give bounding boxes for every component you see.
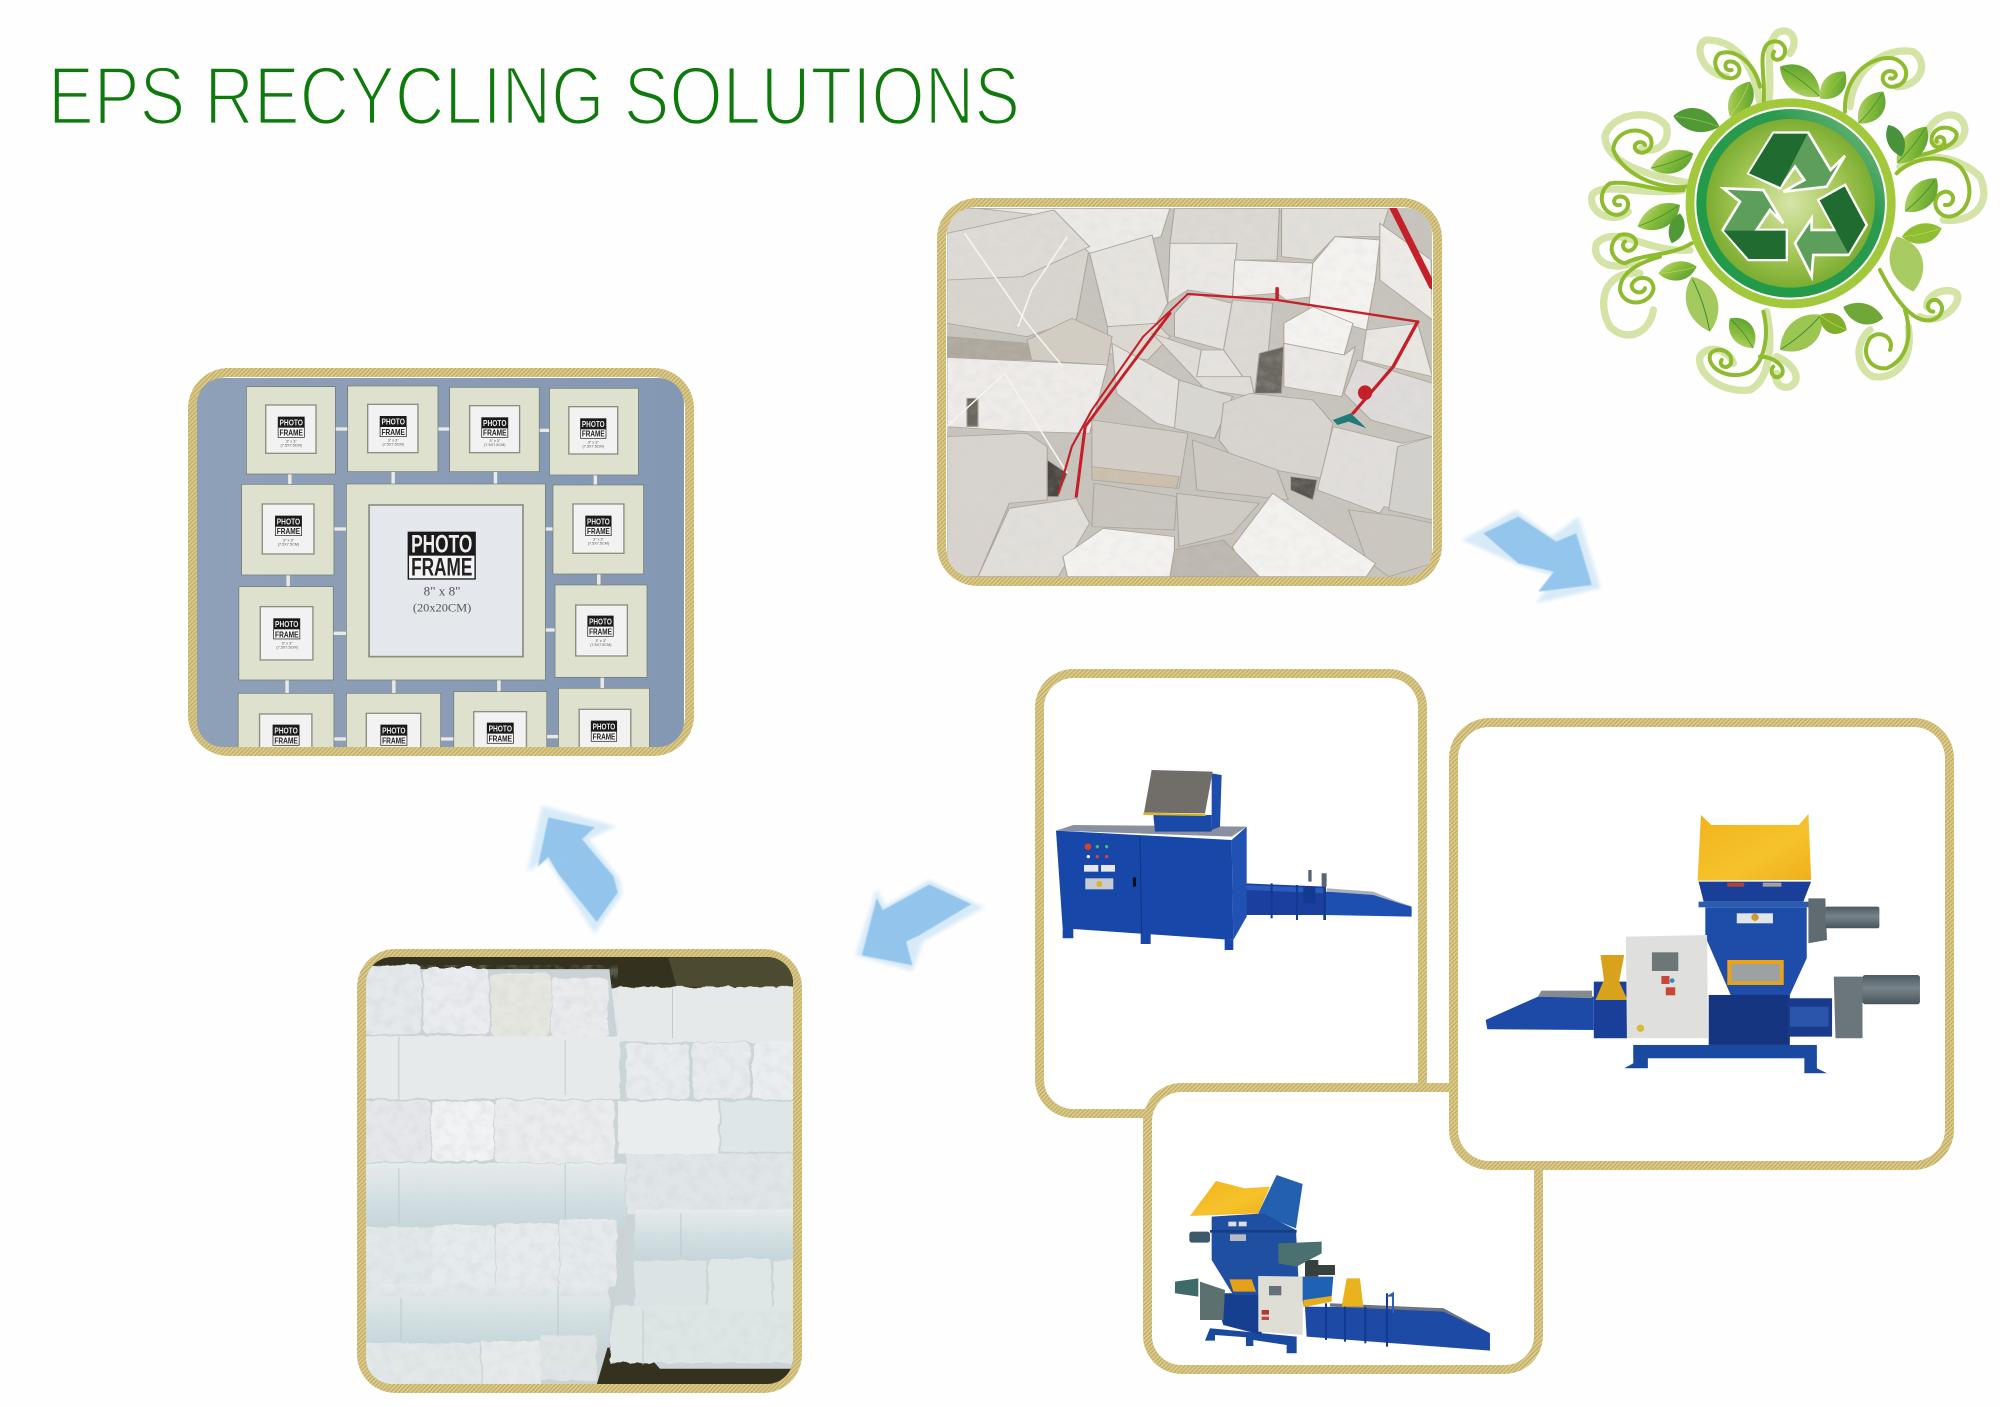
photo frame 7: 3" x 3" [593, 538, 605, 542]
photo frame 1: (7.5X7.5CM) [281, 444, 302, 448]
photo frame 6: large centre frame: PHOTO [411, 531, 472, 559]
photo frame 1: 3" x 3" [286, 440, 297, 444]
photo frame 2: (7.5X7.5CM) [382, 443, 404, 447]
left stack [357, 969, 626, 1384]
photo frame 6: large centre frame: FRAME [411, 554, 472, 582]
arrow: machine to blocks [856, 880, 984, 971]
photo frame 10: FRAME [274, 736, 298, 746]
green vine spirals [1602, 41, 1969, 377]
panel: densifier machine, front view [1454, 722, 1950, 1166]
photo frame 9: PHOTO [589, 616, 612, 626]
panel: recycled photo frame product [191, 372, 690, 753]
pale vine shadows [1592, 31, 1984, 390]
photo frame 1 [246, 387, 335, 474]
right stack [614, 1040, 793, 1369]
photo frame 2 [348, 386, 438, 472]
photo frame 11 [346, 693, 441, 750]
photo frame 4: 3" x 3" [588, 440, 599, 444]
photo frame 8: PHOTO [275, 619, 299, 629]
photo frame 8: (7.5X7.5CM) [276, 646, 298, 650]
photo frame 7: (7.5X7.5CM) [588, 542, 609, 546]
photo frame 5: (7.5X7.5CM) [278, 542, 299, 546]
photo frame 11: FRAME [382, 736, 406, 746]
panel: densifier machine, lower view [1148, 1088, 1538, 1370]
photo: heap of foam boxes tied with red ribbon [938, 203, 1442, 583]
emblem disc [1690, 103, 1891, 304]
photo frame 9: 3" x 3" [595, 639, 607, 643]
photo frame 12 [454, 692, 547, 750]
photo frame 2: 3" x 3" [388, 439, 399, 443]
photo frame 4: (7.5X7.5CM) [583, 444, 604, 448]
machine: blue shredder with chute [1056, 770, 1412, 950]
panel: compressed EPS blocks [357, 947, 803, 1392]
panel: shredder machine [1040, 674, 1422, 1114]
photo frame 1: FRAME [280, 428, 303, 438]
photo frame 13: PHOTO [593, 721, 616, 731]
photo frame 8: FRAME [275, 629, 299, 639]
photo frame 9 [555, 585, 647, 677]
photo frame 7 [553, 485, 644, 574]
photo frame 2: FRAME [381, 427, 405, 437]
photo frame 2: PHOTO [381, 417, 405, 427]
photo frame 7: PHOTO [587, 516, 610, 526]
title: EPS RECYCLING SOLUTIONS [48, 49, 1020, 142]
photo frame 10: PHOTO [274, 725, 298, 735]
photo frame 7: FRAME [587, 526, 610, 536]
photo frame 8 [239, 587, 333, 680]
white strings [947, 233, 1067, 473]
photo frame 5: FRAME [277, 526, 300, 536]
photo frame 3: (7.5X7.5CM) [484, 443, 505, 447]
photo frame 5 [242, 484, 334, 575]
panel: waste EPS foam boxes [938, 202, 1442, 583]
photo frame 1: PHOTO [280, 417, 303, 427]
photo frame 4 [550, 388, 638, 475]
leaves [1633, 55, 1946, 362]
photo frame 6: large centre frame [346, 484, 545, 680]
photo frame 13: FRAME [593, 732, 616, 742]
photo frame 6: large centre frame: (20x20CM) [413, 600, 471, 614]
arrow: waste to machine [1462, 510, 1601, 603]
photo frame 3: PHOTO [483, 418, 507, 428]
photo frame 4: FRAME [582, 429, 605, 439]
photo frame 12: FRAME [489, 734, 512, 744]
photo frame 13 [558, 688, 649, 750]
photo: wall photo frames [191, 373, 690, 753]
photo frame 3: 3" x 3" [489, 439, 501, 443]
machine: EPS compactor with yellow hopper [1486, 814, 1920, 1073]
recycling arrows [1723, 133, 1867, 277]
icon: recycling emblem with vines and leaves [1592, 31, 1984, 390]
connecting rods [285, 427, 604, 741]
photo frame 9: (7.5X7.5CM) [590, 643, 612, 647]
red ribbon [1058, 208, 1432, 497]
arrow: blocks to products [527, 806, 622, 934]
photo frame 4: PHOTO [582, 419, 605, 429]
photo frame 6: large centre frame: 8" x 8" [424, 585, 460, 599]
photo frame 9: FRAME [589, 627, 612, 637]
photo: stacked white foam blocks [357, 947, 803, 1392]
photo frame 5: PHOTO [277, 516, 300, 526]
block seams [399, 989, 681, 1365]
photo frame 8: 3" x 3" [282, 642, 293, 646]
photo frame 3 [450, 387, 539, 472]
photo frame 10 [238, 693, 334, 750]
machine: angled EPS compactor [1175, 1175, 1490, 1353]
photo frame 5: 3" x 3" [283, 538, 295, 542]
photo frame 3: FRAME [483, 428, 507, 438]
photo frame 11: PHOTO [382, 725, 406, 735]
photo frame 12: PHOTO [489, 723, 512, 733]
